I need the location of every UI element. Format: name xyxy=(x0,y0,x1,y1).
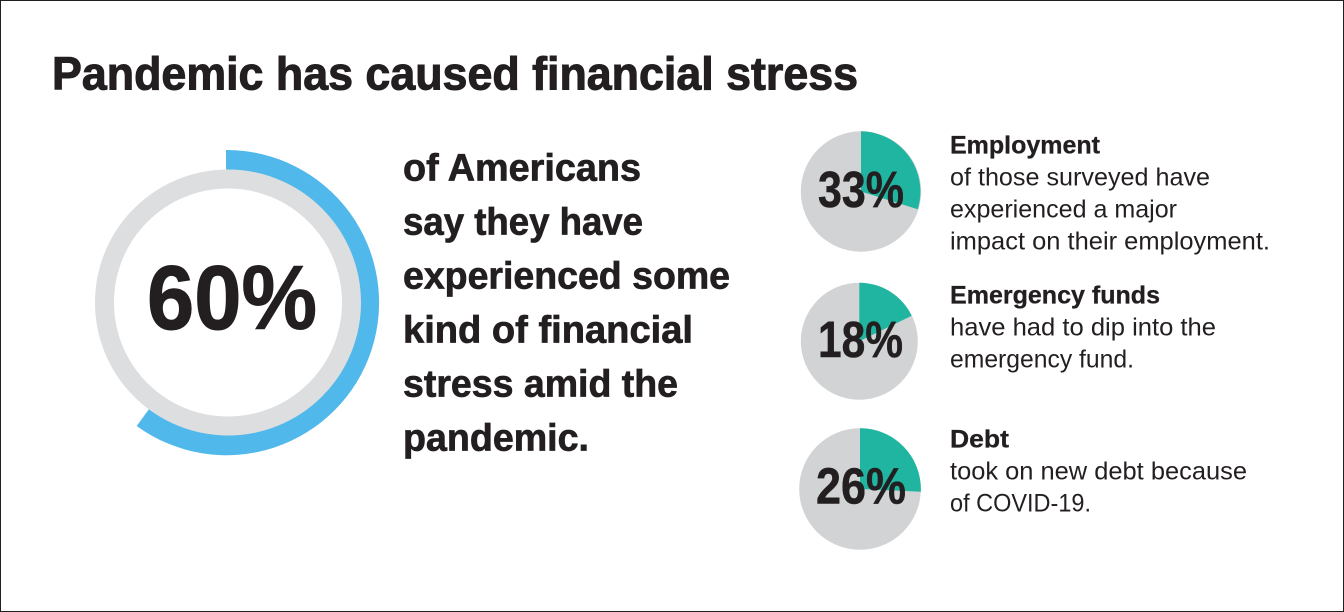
pie chart: emergency funds 18% xyxy=(801,283,918,400)
pie chart: emergency funds 18%: 18% xyxy=(818,311,903,368)
pie chart: employment 33% xyxy=(801,131,921,252)
text block: employment xyxy=(950,132,1270,256)
chart: 60% ring xyxy=(104,150,379,455)
title: Pandemic has caused financial stress xyxy=(52,48,858,100)
text block: debt: of COVID-19. xyxy=(950,490,1091,518)
text block: debt xyxy=(950,426,1247,518)
text block: debt: Debt xyxy=(950,426,1010,454)
chart: 60% ring: 60% xyxy=(147,248,317,349)
text block: emergency funds: have had to dip into the xyxy=(950,314,1216,342)
pie chart: employment 33%: 33% xyxy=(818,161,904,218)
pie chart: debt 26%: 26% xyxy=(816,458,906,514)
text block: emergency funds: emergency fund. xyxy=(950,346,1134,374)
text block: employment: experienced a major xyxy=(950,196,1177,224)
text block: 60% description: stress amid the xyxy=(403,364,678,406)
text block: 60% description xyxy=(403,148,730,460)
text block: 60% description: pandemic. xyxy=(403,418,589,460)
text block: 60% description: of Americans xyxy=(403,148,641,190)
text block: employment: of those surveyed have xyxy=(950,164,1210,192)
text block: 60% description: say they have xyxy=(403,202,643,244)
text block: debt: took on new debt because xyxy=(950,458,1247,486)
text block: 60% description: experienced some xyxy=(403,256,730,298)
text block: employment: Employment xyxy=(950,132,1101,160)
pie chart: debt 26% xyxy=(799,428,921,550)
text block: emergency funds: Emergency funds xyxy=(950,282,1160,310)
text block: emergency funds xyxy=(950,282,1216,374)
text block: employment: impact on their employment. xyxy=(950,228,1270,256)
text block: 60% description: kind of financial xyxy=(403,310,693,352)
